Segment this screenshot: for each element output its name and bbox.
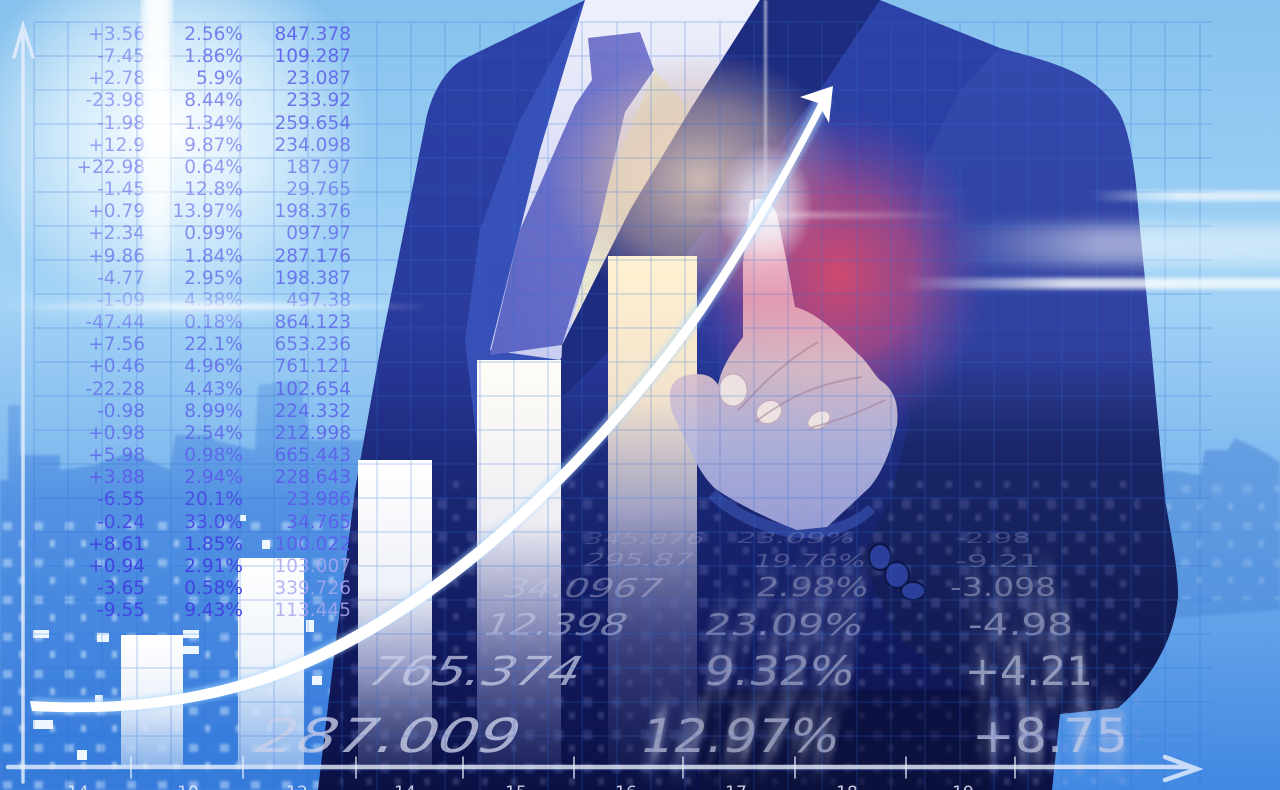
data table column: change: +2.78 <box>88 68 145 89</box>
data table column: change <box>77 24 145 621</box>
city skyline left <box>0 380 370 790</box>
sleeve buttons <box>869 544 925 600</box>
data table column: value: 23.986 <box>286 489 351 510</box>
businessman <box>318 0 1178 790</box>
large perspective numbers column 3: -3.098 <box>950 573 1056 603</box>
data table column: value: 097.97 <box>286 223 351 244</box>
hand pointing <box>670 199 897 530</box>
bar chart <box>121 256 697 765</box>
data table column: change: +0.79 <box>88 201 145 222</box>
data table column: value: 102.654 <box>274 379 351 400</box>
data table column: change: -0.24 <box>97 512 145 533</box>
data table column: value: 339.726 <box>274 578 351 599</box>
large perspective numbers column 2: 2.98% <box>754 573 871 603</box>
data table column: value: 224.332 <box>274 401 351 422</box>
data table column: value: 23.087 <box>286 68 351 89</box>
large perspective numbers column 2: 12.97% <box>636 709 845 763</box>
vertical axis with arrow <box>14 26 33 782</box>
data table column: percent: 8.44% <box>184 90 243 111</box>
data table column: change: +12.9 <box>88 135 145 156</box>
data table column: change: -22.28 <box>85 379 145 400</box>
data table column: percent: 22.1% <box>184 334 243 355</box>
warm glow by finger <box>550 50 850 310</box>
data table column: value: 234.098 <box>274 135 351 156</box>
bar 3 <box>358 460 432 765</box>
data table column: value: 34.765 <box>286 512 351 533</box>
data table column: percent: 8.99% <box>184 401 243 422</box>
data table column: change: -9.55 <box>97 600 145 621</box>
data table column: value: 665.443 <box>274 445 351 466</box>
lower torso windows <box>340 480 1140 790</box>
data table column: value: 198.376 <box>274 201 351 222</box>
data table column: change: +2.34 <box>88 223 145 244</box>
data table column: percent: 12.8% <box>184 179 243 200</box>
lens flares <box>0 0 1280 320</box>
data table column: change: +0.98 <box>88 423 145 444</box>
data table column: value: 113.445 <box>274 600 351 621</box>
data table column: percent: 4.38% <box>184 290 243 311</box>
left lapel <box>465 0 585 470</box>
axis labels <box>67 783 974 790</box>
large perspective numbers column 3 <box>950 529 1128 764</box>
large perspective numbers column 3: +8.75 <box>972 709 1128 764</box>
shirt <box>490 0 760 360</box>
data table column: value: 103.007 <box>274 556 351 577</box>
bar 4 <box>477 360 561 765</box>
right lapel <box>560 0 880 400</box>
data table column: percent: 20.1% <box>184 489 243 510</box>
data table column: percent: 1.85% <box>184 534 243 555</box>
large perspective numbers column 2: 19.76% <box>751 551 868 572</box>
data table column: value: 212.998 <box>274 423 351 444</box>
data table column: change: +8.61 <box>88 534 145 555</box>
data table column: value: 259.654 <box>274 113 351 134</box>
large perspective numbers column 1 <box>245 529 709 763</box>
data table column: change: +3.56 <box>88 24 145 45</box>
data table column: percent: 13.97% <box>172 201 243 222</box>
data table column: change: -0.98 <box>97 401 145 422</box>
data table column: percent: 0.64% <box>184 157 243 178</box>
data table column: change: -47.44 <box>85 312 145 333</box>
large perspective numbers column 1: 12.398 <box>476 608 634 643</box>
large perspective numbers column 3: -9.21 <box>955 551 1040 572</box>
jacket body <box>318 0 1178 790</box>
data table column: change: +9.86 <box>88 246 145 267</box>
data table column: percent: 2.56% <box>184 24 243 45</box>
data table column: percent: 2.95% <box>184 268 243 289</box>
large perspective numbers column 1: 287.009 <box>245 708 532 763</box>
data table column: change: +5.98 <box>88 445 145 466</box>
fingernails <box>719 374 833 433</box>
data table column: percent: 5.9% <box>196 68 243 89</box>
large perspective numbers column 3: -4.98 <box>968 608 1073 643</box>
data table column: percent: 0.98% <box>184 445 243 466</box>
data table column: percent: 2.94% <box>184 467 243 488</box>
growth curve glow <box>32 98 825 707</box>
data table column: percent: 2.91% <box>184 556 243 577</box>
data table column: value: 233.92 <box>286 90 351 111</box>
flare over fingertip <box>717 143 813 267</box>
data table column: value: 847.378 <box>274 24 351 45</box>
large perspective numbers column 3: -2.98 <box>955 529 1031 547</box>
horizontal axis with arrow <box>8 757 1197 780</box>
large perspective numbers column 2: 23.09% <box>701 608 867 643</box>
data table column: change: -4.77 <box>97 268 145 289</box>
large perspective numbers column 1: 765.374 <box>357 648 593 695</box>
large perspective numbers column 3: +4.21 <box>965 649 1093 695</box>
data table column: percent: 9.87% <box>184 135 243 156</box>
data table column: value: 228.643 <box>274 467 351 488</box>
data table column: percent: 4.43% <box>184 379 243 400</box>
finger folds <box>738 342 885 428</box>
data table column: change: +3.88 <box>88 467 145 488</box>
axis ticks <box>131 757 1015 778</box>
data table column: value: 287.176 <box>274 246 351 267</box>
data table column: value: 497.38 <box>286 290 351 311</box>
growth curve arrow <box>30 86 833 712</box>
data table column: change: -3.65 <box>97 578 145 599</box>
data table column: percent: 4.96% <box>184 356 243 377</box>
data table column: change: +22.98 <box>77 157 145 178</box>
data table column: percent: 9.43% <box>184 600 243 621</box>
data table column: percent <box>172 24 243 621</box>
data table column: change: +0.46 <box>88 356 145 377</box>
bar 1 <box>121 635 183 765</box>
data table column: percent: 1.84% <box>184 246 243 267</box>
data table column: percent: 0.18% <box>184 312 243 333</box>
background glow top left <box>0 0 370 320</box>
tie <box>490 32 654 355</box>
large perspective numbers column 2 <box>636 529 871 763</box>
data table column: change: -23.98 <box>85 90 145 111</box>
data table column: change: -1.45 <box>97 179 145 200</box>
data table column: value: 29.765 <box>286 179 351 200</box>
data table column: change: -7.45 <box>97 46 145 67</box>
data table column: percent: 0.58% <box>184 578 243 599</box>
data table column: value: 864.123 <box>274 312 351 333</box>
dark lower centre <box>700 690 990 790</box>
data table column: value: 198.387 <box>274 268 351 289</box>
data table column: change: -1-09 <box>96 290 145 311</box>
city skyline right <box>1150 438 1280 620</box>
bar 2 <box>238 558 304 765</box>
data table column: change: -1.98 <box>97 113 145 134</box>
data table column: change: +0.94 <box>88 556 145 577</box>
data table column: percent: 2.54% <box>184 423 243 444</box>
data table column: value <box>274 24 351 621</box>
data table column: value: 761.121 <box>274 356 351 377</box>
data table column: change: +7.56 <box>88 334 145 355</box>
data table column: value: 100.022 <box>274 534 351 555</box>
large perspective numbers column 1: 295.87 <box>580 550 698 571</box>
data table column: change: -6.55 <box>97 489 145 510</box>
red glow <box>688 110 988 440</box>
data table column: percent: 0.99% <box>184 223 243 244</box>
cuff <box>708 490 875 538</box>
data table column: percent: 1.34% <box>184 113 243 134</box>
large perspective numbers column 1: 34.0967 <box>497 574 669 604</box>
shirt cream right side <box>570 70 690 335</box>
bar 5 <box>608 256 697 765</box>
data table column: percent: 33.0% <box>184 512 243 533</box>
data table column: value: 187.97 <box>286 157 351 178</box>
data table column: percent: 1.86% <box>184 46 243 67</box>
jacket arm <box>860 48 1178 714</box>
large perspective numbers column 2: 9.32% <box>700 648 858 695</box>
large perspective numbers column 1: 345.876 <box>580 529 709 548</box>
data table column: value: 653.236 <box>274 334 351 355</box>
large perspective numbers column 2: 23.09% <box>734 529 858 547</box>
data table column: value: 109.287 <box>274 46 351 67</box>
